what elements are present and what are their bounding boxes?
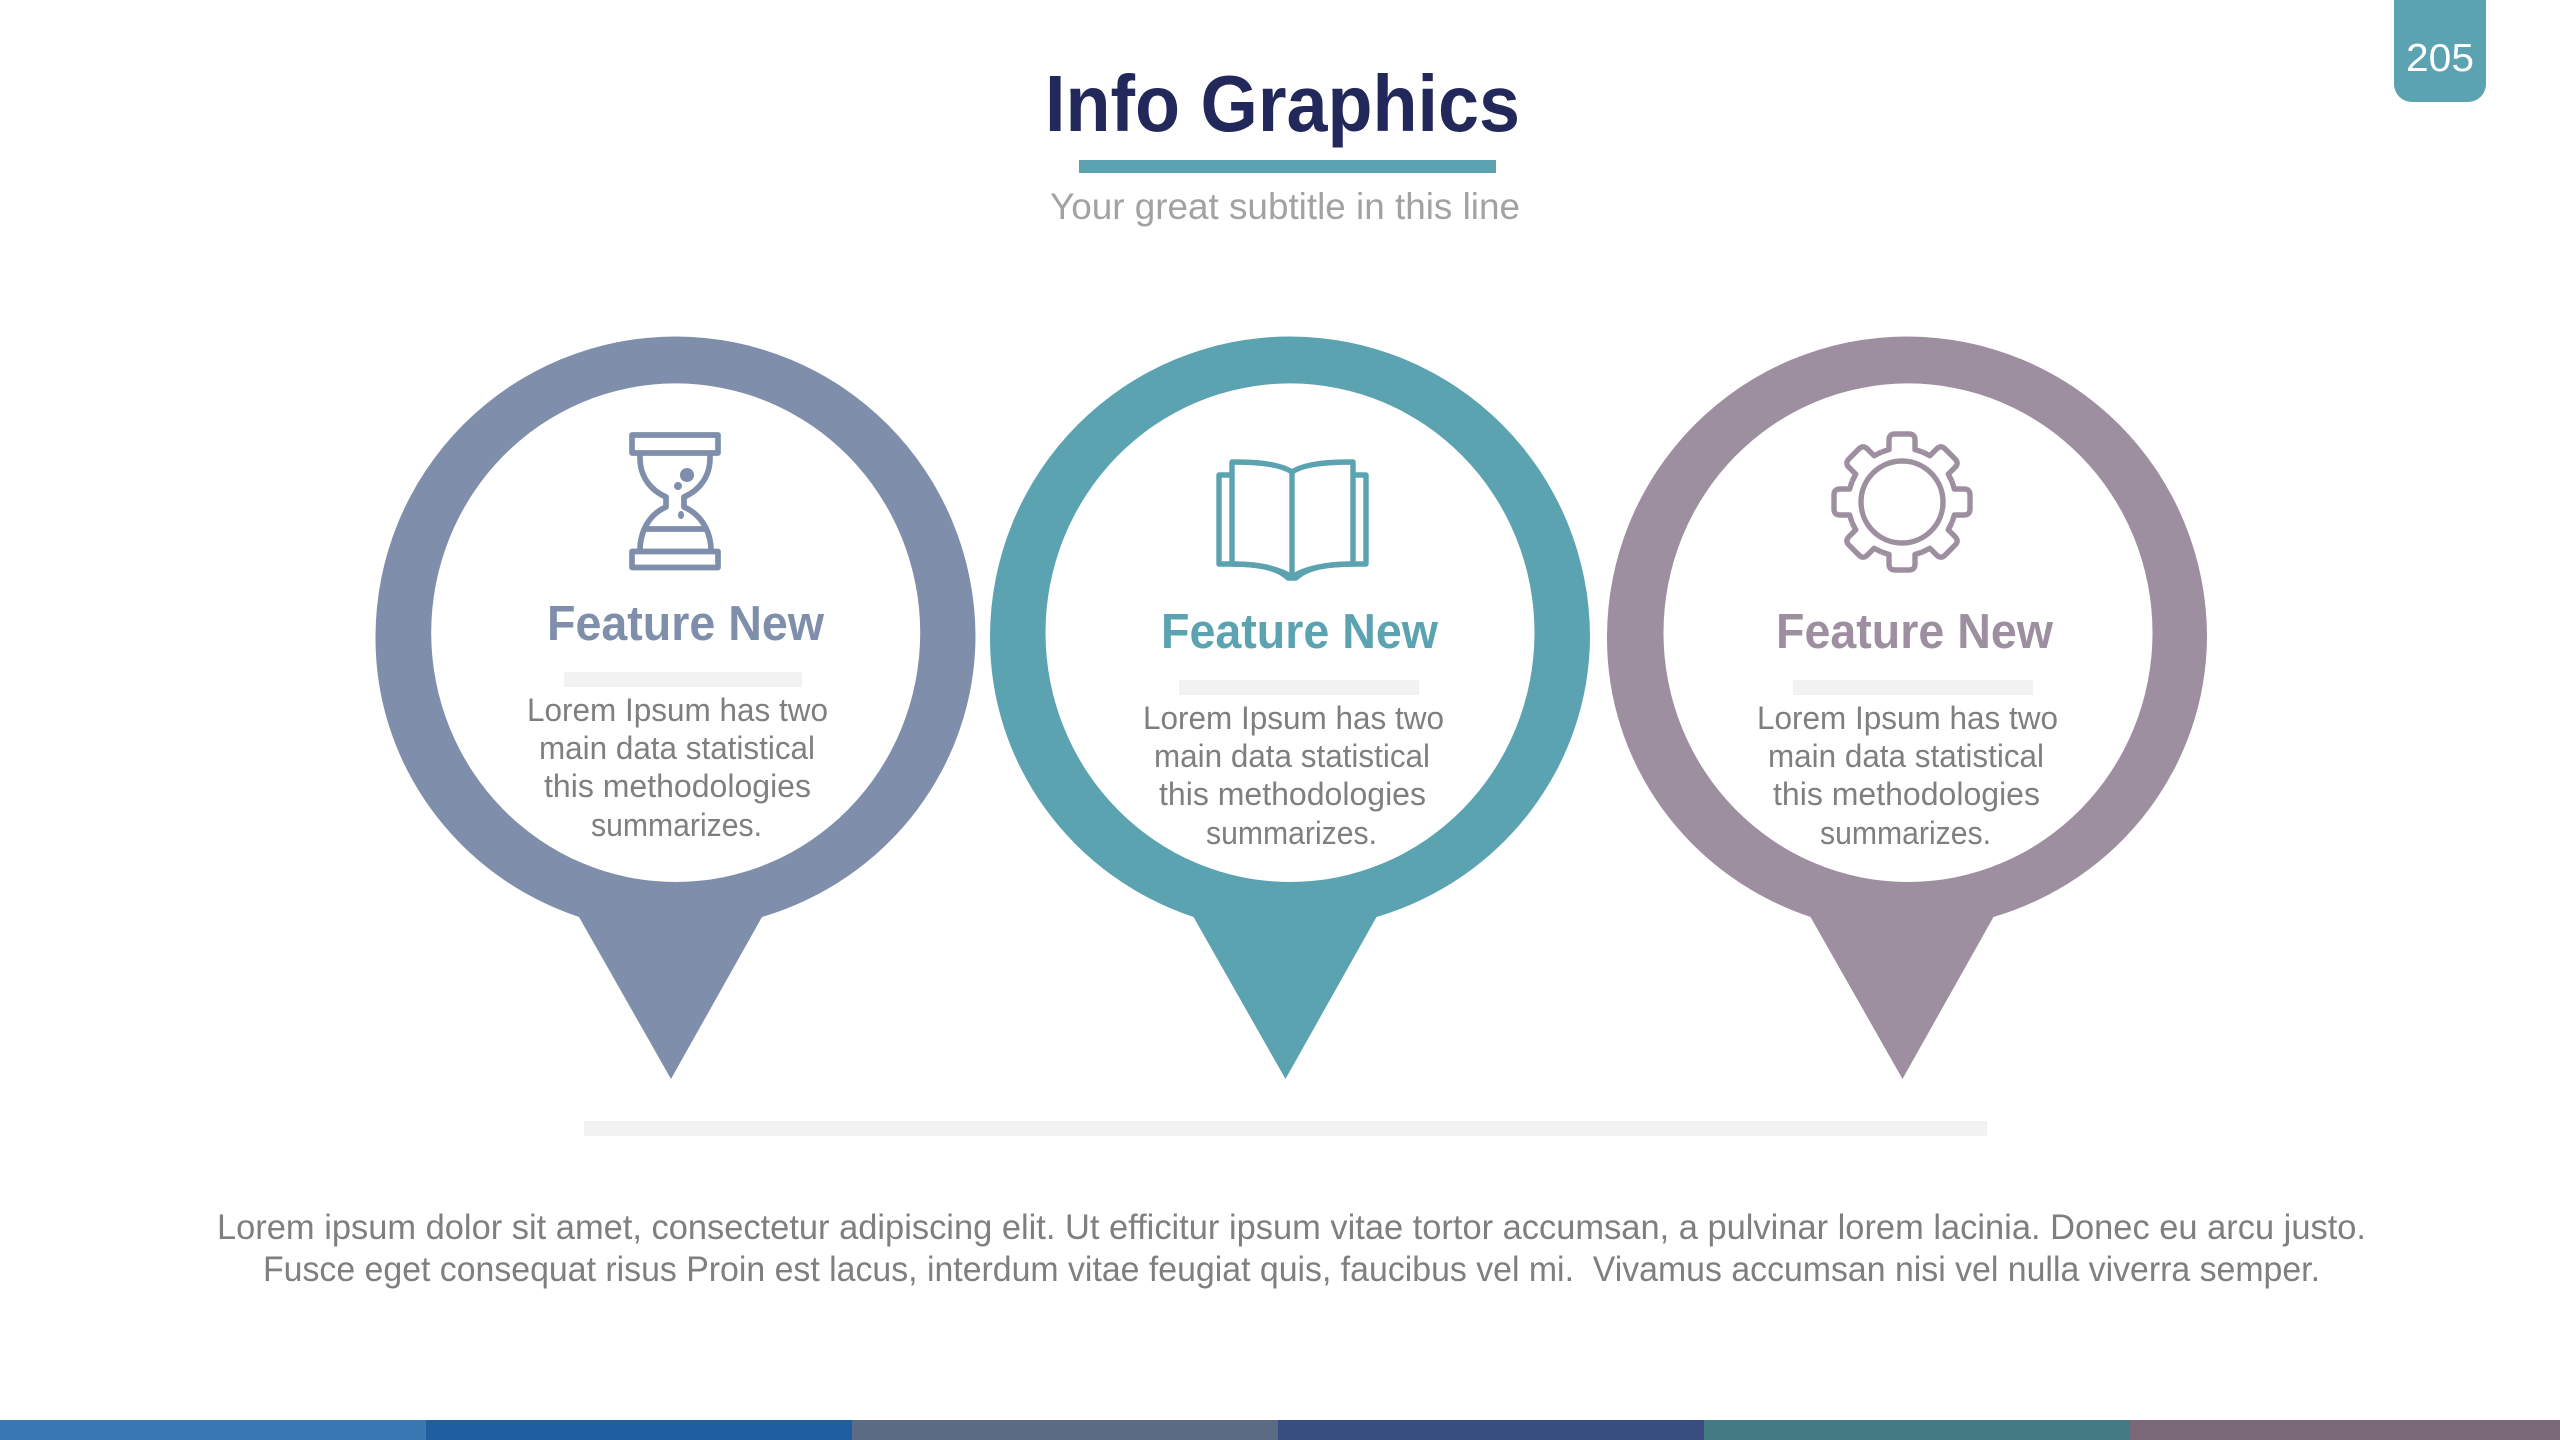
- panel: feature 2 pin: [990, 336, 1590, 1079]
- page number tab: [2394, 0, 2486, 102]
- feature description: main data statistical: [539, 730, 815, 766]
- pin inner circle: [1046, 383, 1534, 882]
- feature description: this methodologies: [1773, 776, 2040, 812]
- feature description: Lorem Ipsum has two: [527, 692, 828, 728]
- icon: gear: [1834, 434, 1970, 570]
- title: Info Graphics: [1045, 59, 1520, 148]
- heading bar: [564, 672, 802, 687]
- subtitle: Your great subtitle in this line: [1050, 186, 1520, 227]
- feature heading: Feature New: [1776, 605, 2054, 659]
- feature description: [1143, 700, 1444, 851]
- panel: feature 3 pin: [1607, 336, 2207, 1079]
- title underline: [1079, 160, 1496, 173]
- feature description: main data statistical: [1154, 738, 1430, 774]
- body text: [217, 1208, 2366, 1289]
- feature description: Lorem Ipsum has two: [1143, 700, 1444, 736]
- pin shape: [1607, 336, 2207, 1079]
- icon: hourglass: [632, 435, 718, 568]
- panel: feature 1 pin: [375, 336, 976, 1079]
- baseline bar: [584, 1121, 1987, 1136]
- page number: 205: [2406, 37, 2474, 80]
- feature description: this methodologies: [544, 768, 811, 804]
- feature description: [527, 692, 828, 843]
- pin inner circle: [431, 383, 920, 882]
- feature description: Lorem Ipsum has two: [1757, 700, 2058, 736]
- pin inner circle: [1664, 383, 2152, 882]
- feature heading: Feature New: [547, 597, 825, 651]
- body text: Lorem ipsum dolor sit amet, consectetur adipiscing elit. Ut efficitur ipsum vitae tortor accumsan, a pulvinar lorem lacinia. Donec eu arcu justo.: [217, 1208, 2366, 1247]
- feature description: summarizes.: [591, 807, 762, 843]
- heading bar: [1793, 680, 2033, 695]
- pin shape: [990, 336, 1590, 1079]
- feature heading: Feature New: [1161, 605, 1439, 659]
- feature description: [1757, 700, 2058, 851]
- icon: open book: [1219, 462, 1366, 578]
- heading bar: [1179, 680, 1419, 695]
- feature description: summarizes.: [1206, 815, 1377, 851]
- feature description: main data statistical: [1768, 738, 2044, 774]
- body text: Fusce eget consequat risus Proin est lacus, interdum vitae feugiat quis, faucibus vel mi. Vivamus accumsan nisi vel nulla viverra semper.: [263, 1250, 2320, 1289]
- pin shape: [375, 336, 976, 1079]
- footer colour strip: [0, 1420, 2560, 1440]
- feature description: summarizes.: [1820, 815, 1991, 851]
- feature description: this methodologies: [1159, 776, 1426, 812]
